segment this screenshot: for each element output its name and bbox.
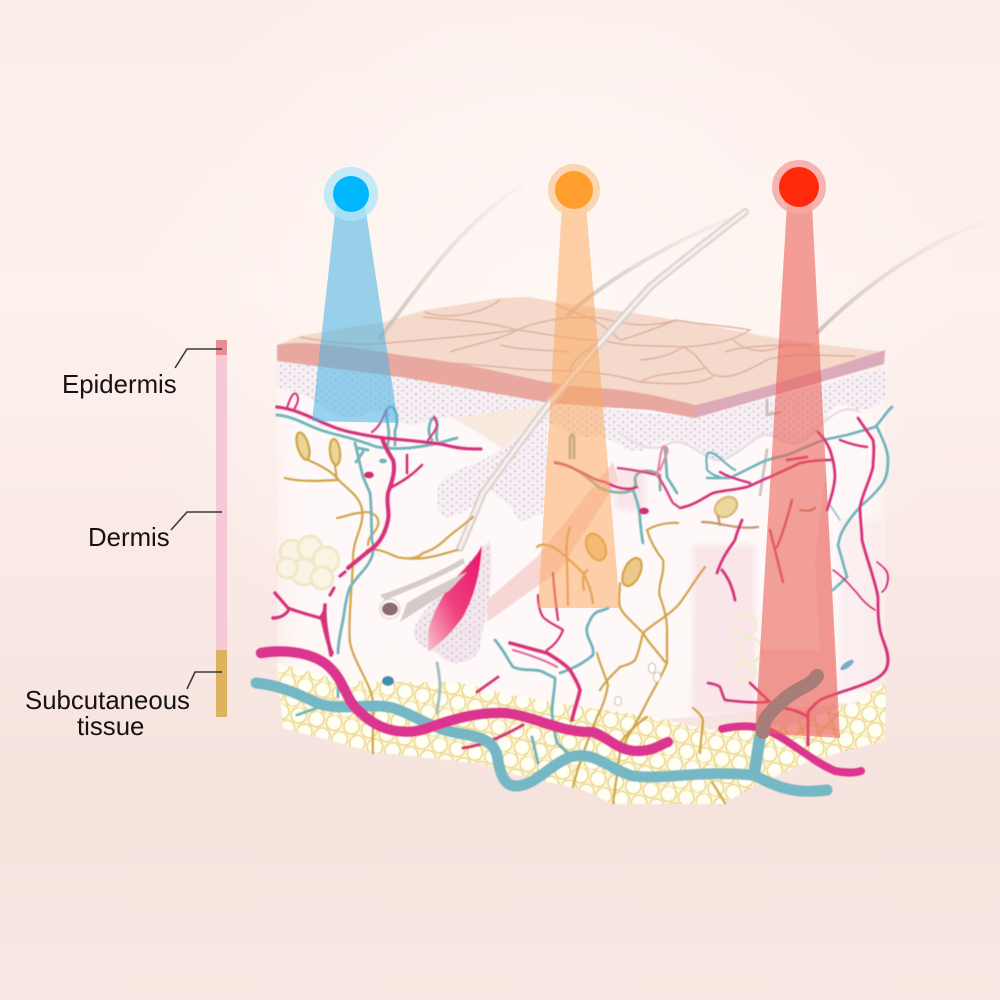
- hair follicle sheath: [413, 540, 492, 663]
- rete ridge outline: [620, 409, 860, 460]
- second artery (magenta): [722, 726, 861, 772]
- pale tinted dermis columns: [615, 470, 882, 715]
- large vein (teal): [256, 683, 827, 791]
- light source: red: [772, 160, 826, 214]
- faint gland right: [734, 614, 762, 682]
- faint yellow gland: [277, 536, 339, 589]
- light beam: blue: [312, 205, 398, 423]
- follicle bulb: [428, 545, 482, 652]
- sebaceous gland: [437, 405, 547, 522]
- large artery (magenta): [261, 651, 668, 751]
- arterioles (magenta): [273, 393, 888, 748]
- light beam: red: [755, 205, 840, 738]
- label: subcutaneous tissue: tissue: [77, 713, 144, 741]
- hair shaft tube: [380, 558, 467, 622]
- hair cut end: [380, 599, 400, 619]
- light source: blue: [324, 167, 378, 221]
- subcutaneous fat cells: [277, 663, 886, 804]
- small vessel cross-sections: [364, 458, 855, 706]
- erector muscle: [487, 462, 618, 622]
- epidermis dotted layer: [277, 360, 885, 459]
- label: epidermis: Epidermis: [62, 371, 177, 399]
- depth scale bar: [216, 340, 227, 717]
- label: subcutaneous tissue: Subcutaneous: [25, 687, 190, 715]
- label: dermis: Dermis: [88, 524, 170, 552]
- light beam: orange: [538, 205, 620, 608]
- mauve band on right edge: [695, 350, 885, 418]
- nerves (gold): [285, 431, 815, 803]
- label: dermis: [88, 512, 222, 552]
- top surface of skin: [277, 297, 885, 418]
- grey duct under red beam: [763, 676, 817, 732]
- label: subcutaneous tissue: [25, 672, 222, 741]
- label: epidermis: [62, 349, 222, 399]
- vein branch stem: [754, 737, 760, 775]
- panel: skin cross-section: [256, 185, 985, 804]
- pink band on front edge: [277, 343, 695, 418]
- hair lumen: [382, 602, 398, 616]
- dermis block: [277, 380, 885, 725]
- beam shading: red lower: [755, 470, 838, 735]
- capillaries (teal): [277, 407, 892, 763]
- surface crease lines: [300, 300, 855, 384]
- hairs: [380, 185, 985, 548]
- light source: orange: [548, 164, 600, 216]
